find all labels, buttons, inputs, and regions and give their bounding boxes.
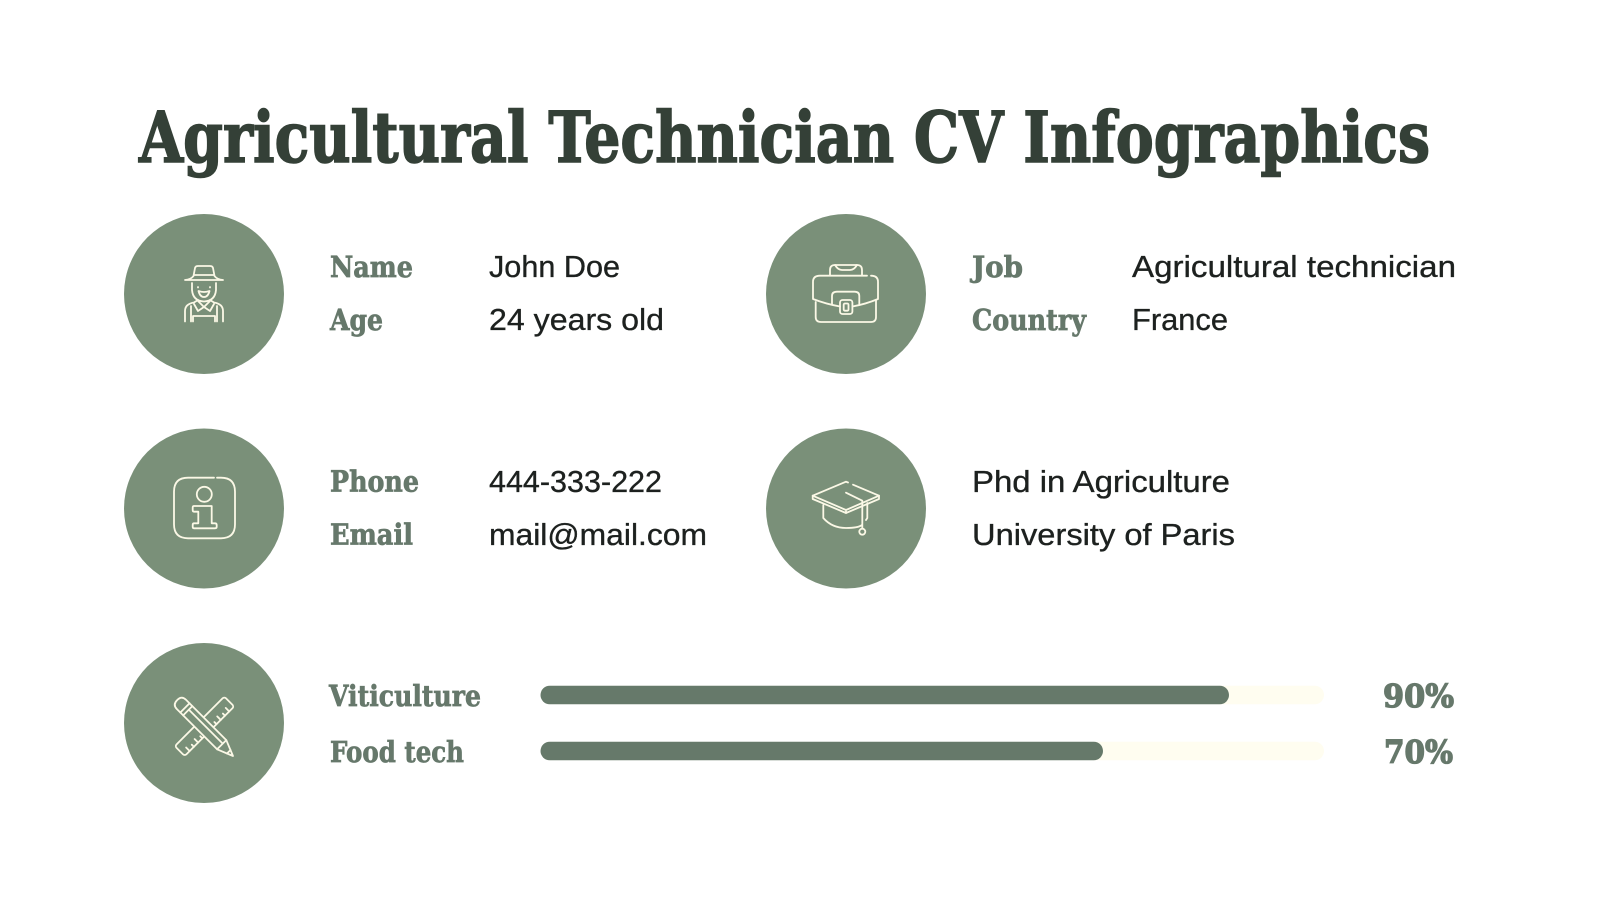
label: job: Job	[969, 250, 1023, 284]
bar track: viticulture	[540, 686, 1324, 704]
label: food tech: Food tech	[330, 735, 464, 769]
bar fill: viticulture 90%	[540, 686, 1229, 704]
icon: briefcase	[766, 214, 926, 374]
panel: job and country	[766, 214, 1456, 374]
icon: graduation cap	[766, 428, 926, 588]
value: phone: 444-333-222	[489, 464, 662, 499]
bar track: food tech	[540, 742, 1324, 760]
label: viticulture: Viticulture	[328, 679, 481, 713]
value: email: mail@mail.com	[489, 517, 707, 552]
label: phone: Phone	[330, 464, 419, 498]
value: job: Agricultural technician	[1132, 249, 1456, 284]
panel: skills	[124, 643, 1454, 803]
label: email: Email	[330, 518, 413, 552]
value: age: 24 years old	[489, 302, 664, 337]
text: degree: Phd in Agriculture	[972, 464, 1230, 499]
panel: education	[766, 428, 1235, 588]
skill: viticulture	[328, 677, 1454, 715]
panel: phone and email	[124, 428, 707, 588]
bar fill: food tech 70%	[540, 742, 1103, 760]
icon: info	[124, 428, 284, 588]
label: country: Country	[972, 303, 1087, 337]
label: name: Name	[330, 250, 413, 284]
value: 70%: 70%	[1384, 733, 1453, 771]
skill: food tech	[330, 733, 1453, 771]
icon: farmer	[124, 214, 284, 374]
panel: name and age	[124, 214, 664, 374]
text: university: University of Paris	[972, 517, 1235, 552]
value: name: John Doe	[489, 249, 620, 284]
value: country: France	[1132, 302, 1228, 337]
label: age: Age	[329, 303, 383, 337]
value: 90%: 90%	[1383, 677, 1454, 715]
icon: pencil and ruler	[124, 643, 284, 803]
